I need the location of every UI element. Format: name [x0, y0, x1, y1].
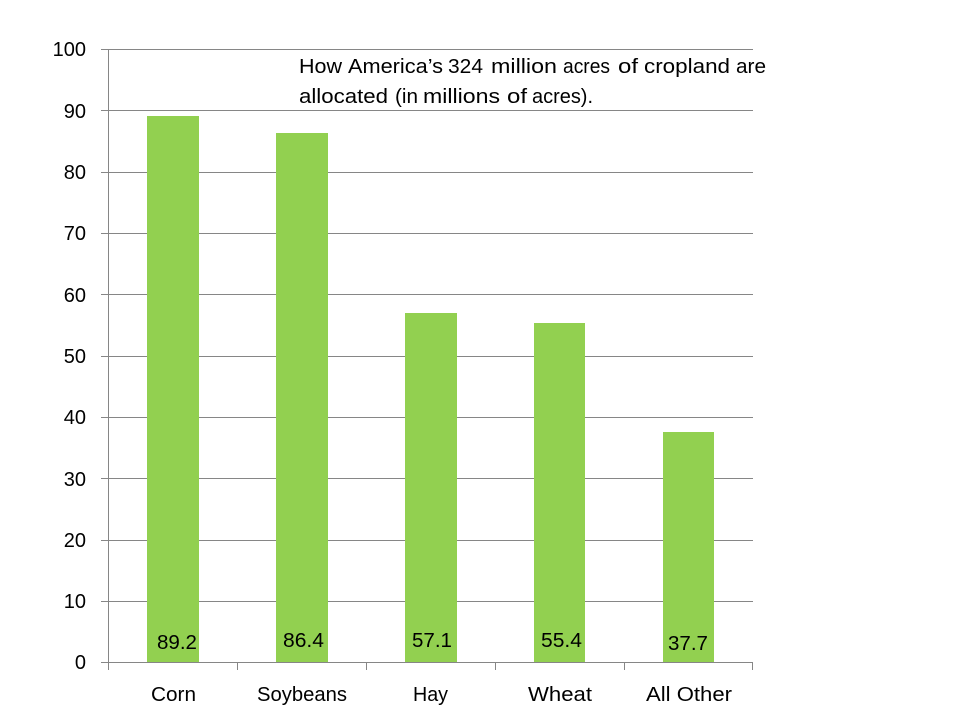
y axis labels: 0 [75, 652, 86, 674]
y axis labels: 30 [64, 469, 86, 491]
bar value labels: 37.7 [668, 633, 708, 655]
y axis labels: 80 [64, 162, 86, 184]
bar value labels: 57.1 [412, 630, 452, 652]
chart title: of [618, 56, 639, 78]
bars [147, 116, 714, 662]
y axis labels: 100 [53, 39, 86, 61]
chart title: are [736, 56, 766, 78]
y axis labels: 10 [64, 591, 86, 613]
chart title [299, 56, 766, 108]
chart title: (in [395, 86, 418, 108]
y axis labels: 90 [64, 101, 86, 123]
y axis labels: 70 [64, 223, 86, 245]
y axis labels: 60 [64, 285, 86, 307]
x axis category labels: All Other [646, 684, 732, 706]
chart title: How [299, 56, 343, 78]
x axis category labels: Soybeans [257, 684, 347, 706]
y axis labels: 50 [64, 346, 86, 368]
chart title: millions [423, 86, 500, 108]
bar value labels: 86.4 [283, 630, 324, 652]
chart title: of [507, 86, 528, 108]
chart title: allocated [299, 86, 388, 108]
chart title: acres [563, 56, 610, 78]
x axis category labels: Wheat [528, 684, 592, 706]
bar value labels: 89.2 [157, 632, 197, 654]
bar value labels [157, 630, 708, 655]
chart title: acres). [532, 86, 593, 108]
y axis labels [53, 39, 86, 674]
y axis labels: 20 [64, 530, 86, 552]
y axis labels: 40 [64, 407, 86, 429]
chart title: cropland [644, 56, 730, 78]
x axis category labels: Hay [413, 684, 448, 706]
chart title: million [491, 56, 557, 78]
chart title: America’s [348, 56, 443, 78]
x axis category labels [151, 684, 732, 706]
chart title: 324 [448, 56, 483, 78]
bar value labels: 55.4 [541, 630, 582, 652]
x axis category labels: Corn [151, 684, 196, 706]
